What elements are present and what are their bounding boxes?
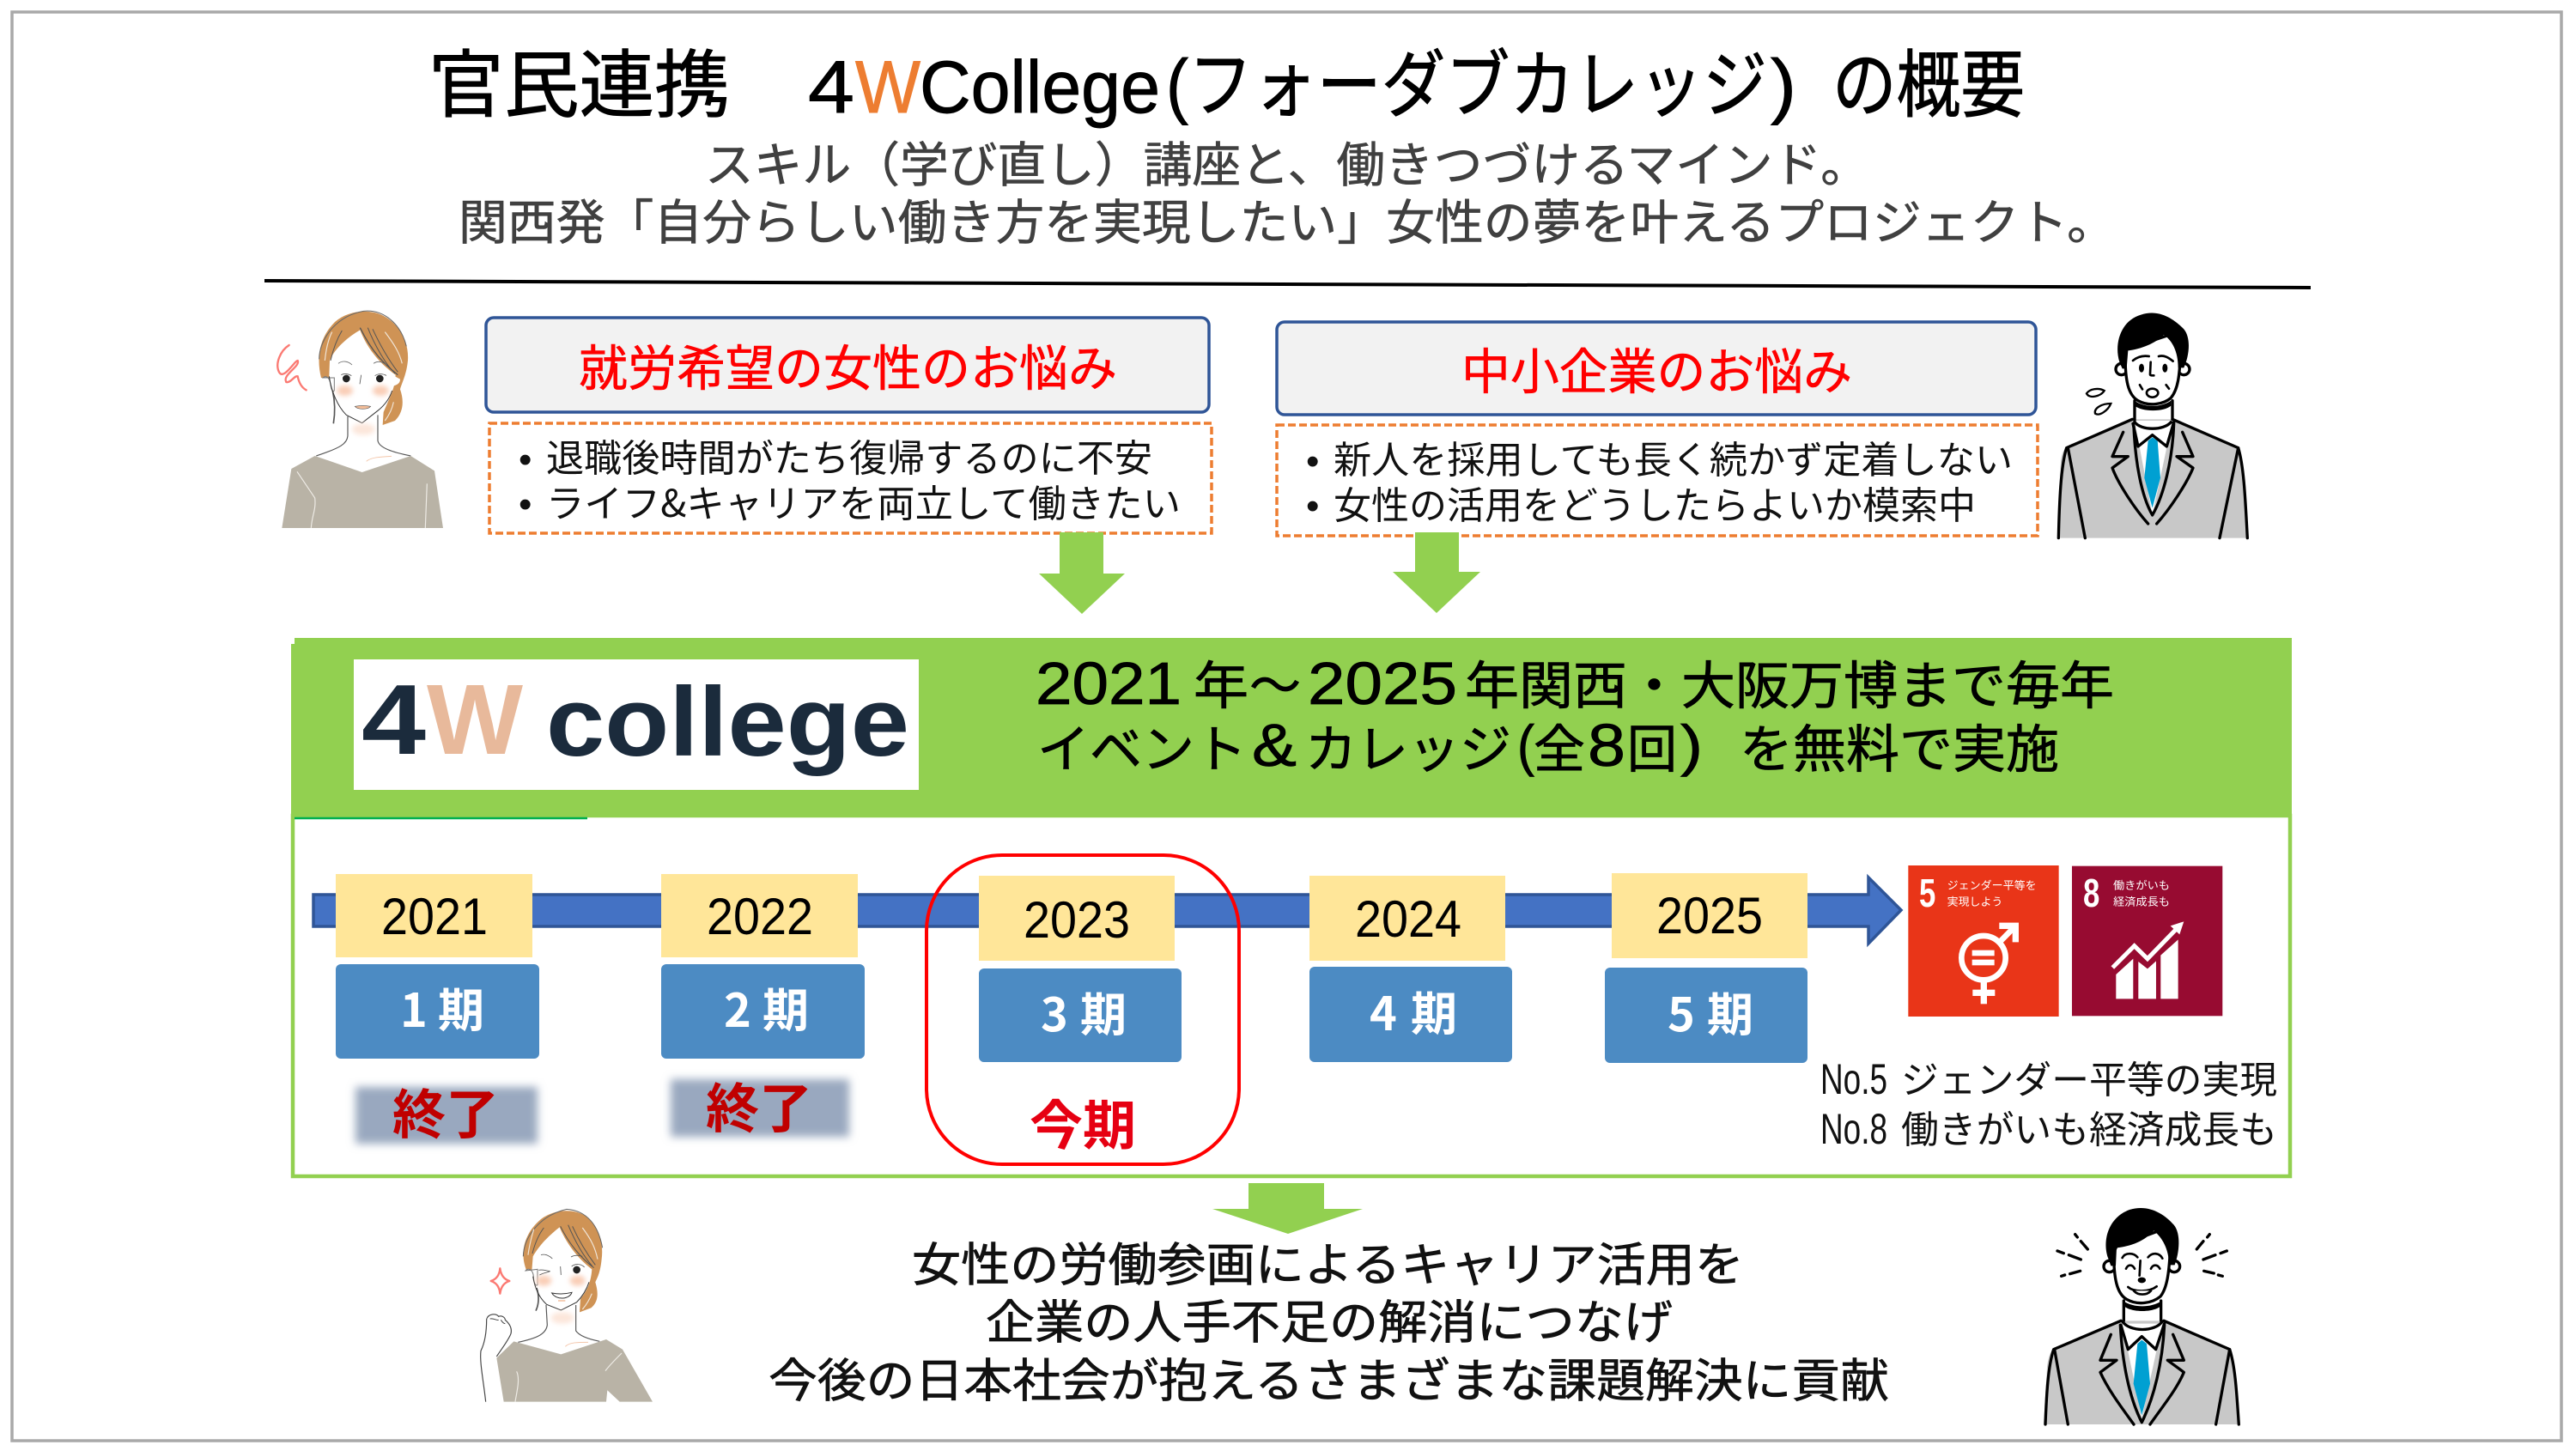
- subtitle: 関西発「自分らしい働き方を実現したい」女性の夢を叶えるプロジェクト。: [459, 185, 2116, 254]
- divider line: [264, 281, 2311, 288]
- text block: •: [519, 439, 532, 481]
- arrow: bottom down: [1212, 1183, 1363, 1234]
- text block: [489, 423, 1212, 533]
- title: (: [1166, 45, 1188, 125]
- term 4: [1309, 967, 1512, 1062]
- title: W: [855, 46, 920, 129]
- text block: •: [1306, 440, 1319, 483]
- header text: 年: [1194, 645, 1249, 719]
- logo: 4: [361, 664, 426, 775]
- text block: 女性の活用をどうしたらよいか模索中: [1334, 475, 1976, 530]
- text block: 新人を採用しても長く続かず定着しない: [1334, 429, 2013, 484]
- term 2: 2: [724, 973, 751, 1041]
- icon: growth chart: [2112, 921, 2184, 999]
- SDG labels: [1820, 1049, 2277, 1154]
- SDG icon 5: [1908, 865, 2059, 1017]
- subtitle: [459, 127, 2116, 254]
- year 2023: [979, 876, 1175, 961]
- subtitle: スキル（学び直し）講座と、働きつづけるマインド。: [705, 127, 1869, 197]
- logo: W: [427, 664, 524, 775]
- year 2024: [1309, 876, 1505, 961]
- SDG icon 5: ジェンダー平等を: [1947, 877, 2037, 893]
- header text: 8: [1588, 712, 1625, 779]
- panel: SME concerns: [1277, 322, 2038, 536]
- text block: •: [1306, 485, 1319, 527]
- logo: college: [546, 668, 909, 777]
- title: 官民連携: [428, 25, 730, 132]
- text block: •: [519, 483, 532, 525]
- title: 4: [808, 46, 854, 129]
- illustration: worried woman: [277, 311, 443, 528]
- title: の概要: [1832, 25, 2025, 132]
- timeline arrow: [313, 877, 1901, 944]
- header text: ～: [1249, 645, 1301, 719]
- header text: 全: [1534, 708, 1585, 783]
- SDG icon 8: 経済成長も: [2113, 893, 2170, 909]
- header text: 2021: [1036, 650, 1182, 717]
- conclusion text: 今後の日本社会が抱えるさまざまな課題解決に貢献: [769, 1343, 1889, 1411]
- term 4: 4: [1370, 976, 1397, 1044]
- panel header band: [291, 638, 2292, 818]
- status: term 1 finished: [355, 1072, 538, 1149]
- SDG labels: 働きがいも経済成長も: [1901, 1099, 2277, 1154]
- header text: &: [1252, 712, 1297, 779]
- SDG icon 8: 働きがいも: [2113, 877, 2170, 893]
- header text: (: [1517, 713, 1534, 777]
- illustration: happy woman: [481, 1209, 653, 1402]
- header text: を無料で実施: [1740, 708, 2059, 783]
- blush: [337, 386, 389, 396]
- term 4: 期: [1411, 976, 1457, 1044]
- heading box: [1277, 322, 2036, 415]
- SDG icon 8: [2072, 866, 2222, 1016]
- term 2: [661, 964, 865, 1059]
- term 5: 期: [1707, 977, 1753, 1045]
- panel: 4W college program: [291, 638, 2292, 1176]
- term 1: 期: [438, 973, 484, 1041]
- year 2023: 2023: [1024, 891, 1130, 949]
- illustration: happy businessman: [2044, 1208, 2239, 1424]
- text block: 退職後時間がたち復帰するのに不安: [546, 428, 1152, 483]
- year 2025: 2025: [1656, 887, 1763, 944]
- header text: 年関西・大阪万博まで毎年: [1465, 645, 2114, 719]
- year 2022: [661, 874, 858, 957]
- term 1: 1: [400, 973, 428, 1041]
- status: current term: 今期: [1030, 1083, 1136, 1160]
- arrow: right down: [1393, 532, 1480, 613]
- panel: women's concerns: [486, 318, 1212, 533]
- year 2022: 2022: [707, 888, 813, 945]
- illustration: worried businessman: [2057, 313, 2247, 538]
- text block: ライフ&キャリアを両立して働きたい: [546, 473, 1181, 528]
- year 2025: [1612, 873, 1807, 958]
- title: College: [920, 46, 1160, 129]
- year 2021: [336, 874, 532, 957]
- year 2021: 2021: [381, 888, 488, 945]
- SDG icon 5: 5: [1919, 871, 1935, 915]
- SDG icon 8: 8: [2083, 871, 2099, 915]
- title: [428, 25, 2025, 132]
- term 5: [1605, 968, 1807, 1063]
- header text: イベント: [1037, 708, 1247, 783]
- header text: 回: [1627, 708, 1677, 783]
- header text: ): [1680, 713, 1703, 777]
- SDG labels: No.8: [1820, 1105, 1887, 1153]
- header text: [1036, 645, 2114, 783]
- icon: gender equality: [1961, 923, 2019, 1004]
- status: term 2 finished: 終了: [706, 1065, 812, 1143]
- SDG labels: ジェンダー平等の実現: [1901, 1049, 2277, 1104]
- conclusion text: 企業の人手不足の解消につなげ: [986, 1284, 1673, 1352]
- text block: [1277, 425, 2038, 536]
- conclusion text: 女性の労働参画によるキャリア活用を: [912, 1227, 1744, 1295]
- status: term 1 finished: 終了: [392, 1072, 499, 1149]
- heading box: [486, 318, 1209, 412]
- blush: [536, 1276, 586, 1286]
- conclusion text: [769, 1227, 1889, 1411]
- status: term 2 finished: [671, 1065, 849, 1143]
- SDG icon 5: 実現しよう: [1947, 893, 2002, 909]
- heading box: 中小企業のお悩み: [1461, 333, 1852, 404]
- term 2: 期: [762, 973, 809, 1041]
- title: ): [1771, 45, 1796, 125]
- SDG labels: No.5: [1820, 1055, 1887, 1103]
- term 3: 3: [1041, 977, 1068, 1045]
- highlight: current term: [927, 855, 1239, 1164]
- title: フォーダブカレッジ: [1188, 25, 1767, 132]
- header text: 2025: [1308, 650, 1457, 717]
- year 2024: 2024: [1355, 890, 1461, 948]
- term 5: 5: [1668, 977, 1695, 1045]
- arrow: left down: [1039, 532, 1125, 614]
- term 3: [979, 968, 1182, 1062]
- term 3: 期: [1080, 977, 1127, 1045]
- term 1: [336, 964, 539, 1059]
- heading box: 就労希望の女性のお悩み: [579, 330, 1117, 400]
- logo: [354, 659, 919, 790]
- header text: カレッジ: [1305, 708, 1511, 783]
